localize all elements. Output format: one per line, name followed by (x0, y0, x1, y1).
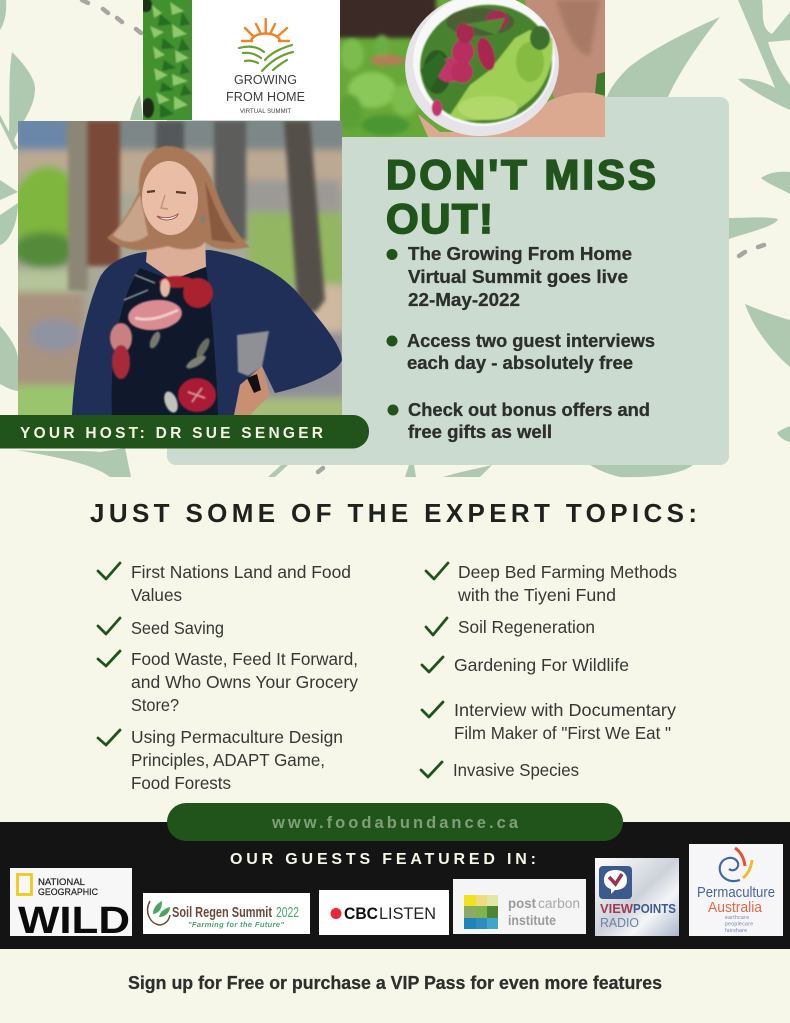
heading: don't miss out: DON'T MISS (386, 151, 656, 198)
logo: Permaculture Australia (689, 844, 783, 936)
heading: don't miss out: OUT! (386, 195, 493, 242)
logo: CBC Listen: CBC (344, 905, 378, 923)
logo: Post Carbon Institute: institute (508, 913, 556, 928)
logo wordmark (226, 73, 305, 115)
logo wordmark: FROM HOME (226, 90, 305, 104)
logo: CBC Listen: LISTEN (379, 905, 436, 923)
logo wordmark: VIRTUAL SUMMIT (240, 109, 291, 115)
topic: Food Waste (98, 649, 358, 715)
earring (201, 215, 205, 223)
logo: Permaculture Australia: earthcare (725, 915, 749, 921)
logo: Soil Regen Summit: 2022 (276, 904, 299, 921)
icon: green fields (239, 45, 293, 71)
host name: YOUR HOST: DR SUE SENGER (20, 425, 323, 442)
background leaf dashes (82, 0, 764, 472)
topic: documentary interview: Film Maker of "First We Eat " (454, 723, 671, 743)
smile and eyes (147, 191, 186, 220)
logo: Viewpoints Radio: RADIO (600, 915, 639, 930)
dress flowers (110, 275, 216, 414)
topic: Deep Bed Farming: with the Tiyeni Fund (457, 585, 616, 605)
logo: Soil Regen Summit: Soil Regen Summit (172, 904, 272, 921)
photo: salad bowl in hands (336, 0, 605, 146)
topic: Permaculture: Principles, ADAPT Game, (131, 750, 325, 770)
gap between arm and body (237, 331, 269, 376)
bullet: free access (386, 330, 655, 373)
logo: Permaculture Australia: fairshare (725, 928, 747, 934)
logo: Permaculture Australia: peoplecare (725, 922, 753, 928)
topic: Food Waste: and Who Owns Your Grocery (131, 672, 358, 692)
bullet: goes live: The Growing From Home (408, 243, 632, 264)
bullet: free access: each day - absolutely free (407, 352, 633, 373)
logo: Soil Regen Summit: "Farming for the Future" (188, 920, 284, 929)
logo: National Geographic Wild: WILD (18, 900, 130, 942)
topic: Gardening For Wildlife: Gardening For Wildlife (454, 655, 629, 675)
logo: National Geographic Wild (10, 868, 132, 942)
website pill: www.foodabundance.ca (271, 814, 519, 832)
topic: documentary interview (422, 700, 676, 743)
cardigan (72, 250, 342, 415)
logo: Permaculture Australia: Permaculture (697, 884, 775, 901)
host name bar (0, 415, 369, 448)
topic list: right column (421, 562, 677, 780)
heading: expert topics: JUST SOME OF THE EXPERT TOPICS: (90, 498, 697, 528)
logo: Viewpoints Radio (595, 858, 679, 936)
logo: CBC Listen (319, 890, 449, 935)
face (140, 160, 200, 236)
logo: Soil Regen Summit (143, 893, 310, 934)
bowl (405, 0, 559, 136)
topic: Permaculture (98, 727, 343, 793)
topic list: left column (98, 562, 358, 793)
bullet: bonus offers (388, 399, 650, 442)
bullet: bonus offers: free gifts as well (408, 421, 552, 442)
topic: Permaculture: Food Forests (131, 773, 231, 793)
photo: host Dr Sue Senger (12, 115, 348, 421)
logo: National Geographic Wild: GEOGRAPHIC (38, 887, 98, 898)
logo: Viewpoints Radio: VIEW (600, 901, 634, 916)
topic: Food Waste: Food Waste, Feed It Forward, (131, 649, 358, 669)
topic: Deep Bed Farming (426, 562, 677, 605)
heading: don't miss out (386, 151, 656, 242)
panel: don't miss out (167, 97, 729, 465)
neck (146, 242, 206, 278)
topic: Soil Regeneration: Soil Regeneration (458, 617, 595, 637)
topic: Deep Bed Farming: Deep Bed Farming Methods (458, 562, 677, 582)
bullet: goes live: Virtual Summit goes live (408, 266, 628, 287)
bullet: goes live: 22-May-2022 (408, 289, 520, 310)
icon: rising sun (242, 19, 289, 41)
hair (107, 146, 250, 250)
topic: First Nations: First Nations Land and Food (131, 562, 351, 582)
topic: Invasive Species: Invasive Species (453, 760, 579, 780)
logo: Growing From Home (192, 0, 340, 120)
topic: Seed Saving: Seed Saving (131, 618, 224, 638)
salad (419, 4, 554, 124)
topic: documentary interview: Interview with Documentary (454, 700, 676, 720)
footer call to action: Sign up for Free or purchase a VIP Pass for even more features (128, 973, 662, 993)
logo: Post Carbon Institute: carbon (538, 896, 580, 911)
bullet: free access: Access two guest interviews (407, 330, 655, 351)
logo: Post Carbon Institute: post (508, 896, 536, 911)
bullet: goes live (386, 243, 632, 310)
website pill (167, 803, 623, 841)
logo: National Geographic Wild: NATIONAL (38, 877, 85, 888)
bullet: bonus offers: Check out bonus offers and (408, 399, 650, 420)
topic: First Nations: Values (131, 585, 182, 605)
topic: Permaculture: Using Permaculture Design (131, 727, 343, 747)
logo: Post Carbon Institute (453, 879, 586, 934)
photo: herbs left of logo (140, 0, 192, 120)
hand and watch (234, 366, 270, 415)
topic: Food Waste: Store? (131, 695, 179, 715)
hands (525, 0, 605, 100)
topic: First Nations (98, 562, 351, 605)
logo: Permaculture Australia: Australia (708, 899, 763, 916)
black guests band (0, 822, 790, 949)
logo: Viewpoints Radio: POINTS (633, 901, 676, 916)
logo wordmark: GROWING (234, 73, 297, 87)
dress (112, 267, 218, 415)
heading: guests featured in: OUR GUESTS FEATURED IN: (230, 851, 536, 868)
background leaf pattern (0, 0, 790, 477)
